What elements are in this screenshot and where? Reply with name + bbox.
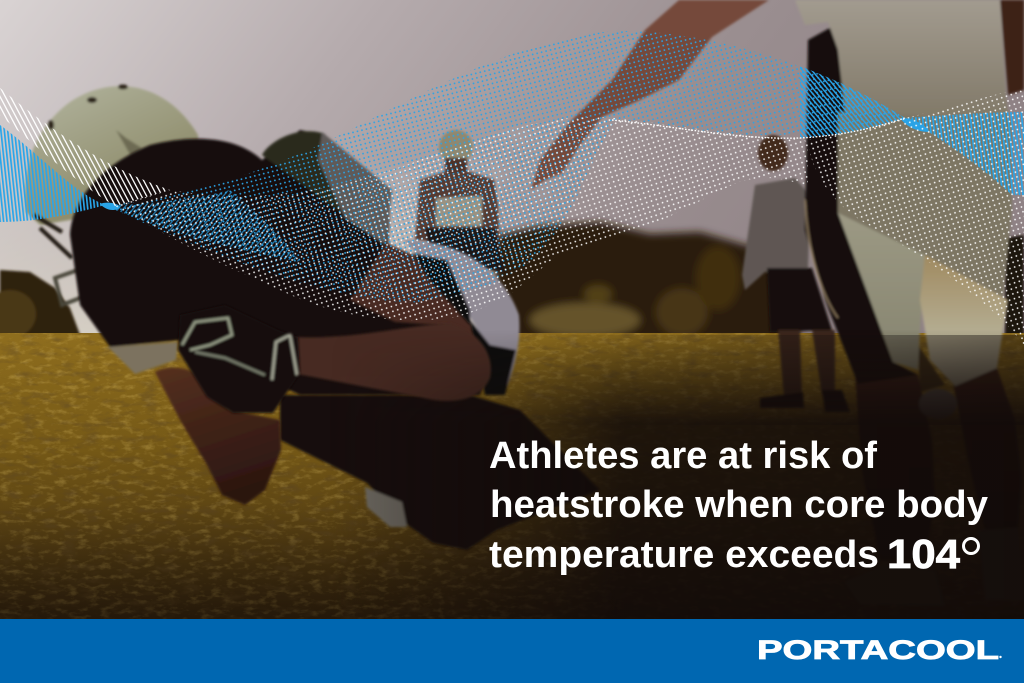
distant tree line left — [0, 270, 82, 340]
main player: torso — [70, 130, 492, 395]
degree symbol — [964, 538, 978, 554]
hip area — [838, 112, 1012, 300]
grass field — [0, 333, 1024, 620]
caption line 1: Athletes are at risk of — [489, 435, 877, 477]
left pant leg — [838, 213, 925, 370]
right calf — [953, 368, 1022, 530]
foreground player: outstretched arm — [531, 0, 769, 190]
main player: forearm — [155, 368, 281, 505]
wave: dense blue near left pinch — [105, 190, 300, 262]
wave: white left tail — [0, 88, 170, 206]
wave: saturated pinch points — [100, 118, 930, 210]
brand footer bar — [0, 619, 1024, 683]
main player: helmet — [25, 84, 200, 225]
dark side panel — [805, 25, 918, 384]
dark gradient behind caption — [330, 330, 1024, 620]
right pant leg — [920, 255, 1008, 386]
right sock and shoe — [978, 528, 1024, 600]
main player: white hip pad — [404, 240, 520, 395]
wave graphic: halftone ribbons — [0, 31, 1024, 345]
logo: PORTACOOL: PORTACOOL — [757, 635, 999, 665]
highlighted temperature: 104 — [887, 531, 960, 577]
distant tree line centre — [495, 222, 800, 340]
foreground player: right side figure — [795, 0, 1024, 606]
main player: shoulder skin — [350, 243, 492, 368]
shirt hem — [108, 342, 178, 374]
trees far right edge — [1005, 235, 1024, 347]
wave: white central lobe — [115, 117, 808, 320]
side panel piping — [805, 200, 838, 318]
caption line 2: heatstroke when core body — [490, 484, 988, 526]
green shoulder pad — [262, 131, 345, 215]
dropped white object — [919, 389, 957, 419]
far arm — [1000, 0, 1024, 95]
wave: blue central lobe — [105, 31, 905, 302]
main player: facemask — [34, 215, 88, 305]
main player: lower body and legs — [280, 395, 600, 550]
caption text — [489, 435, 988, 577]
caption line 3: temperature exceeds — [489, 534, 879, 576]
far thigh grass gap — [918, 345, 945, 392]
wave: dense blue near right pinch — [800, 66, 905, 138]
left calf — [855, 362, 935, 560]
wave: bright crease line — [612, 118, 905, 138]
main player: arm — [295, 323, 491, 401]
left shoe — [845, 565, 945, 606]
main player: glove — [178, 305, 300, 413]
photo background: sky — [0, 0, 1024, 345]
background player in jersey — [415, 130, 505, 272]
wave: white right lobe — [808, 88, 1024, 345]
wave: blue left tail — [0, 125, 105, 222]
wave: blue right lobe — [905, 112, 1024, 195]
jersey — [795, 0, 1010, 125]
background coach — [742, 135, 850, 412]
gray shoulder pad — [318, 132, 392, 245]
